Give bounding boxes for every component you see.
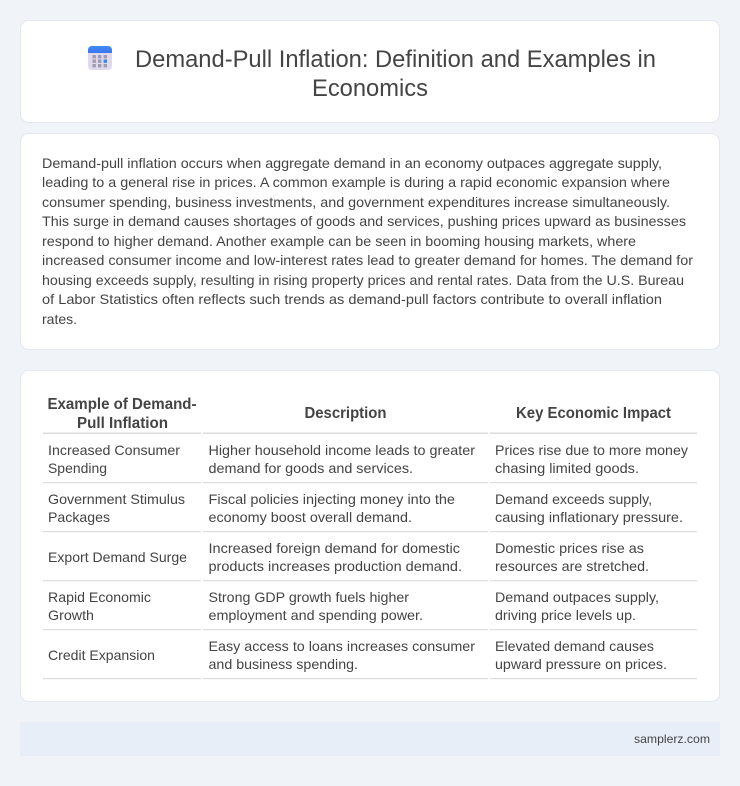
table row: rapid economic growth <box>43 589 697 630</box>
table header: Description <box>304 405 386 422</box>
table header: Key Economic Impact <box>516 405 671 422</box>
title text <box>135 46 656 102</box>
table row: government stimulus packages: Fiscal policies injecting money into the <box>208 491 455 507</box>
table row: government stimulus packages <box>43 491 697 532</box>
table row: rapid economic growth: Growth <box>48 607 94 623</box>
table row: credit expansion: and business spending. <box>208 656 358 672</box>
paragraph text: consumer spending, business investments, and government expenditures increase simultaneously. <box>42 194 670 210</box>
table row: government stimulus packages: causing inflationary pressure. <box>495 509 683 525</box>
panel: title <box>20 20 720 122</box>
table row: rapid economic growth: Demand outpaces supply, <box>495 589 659 605</box>
table row: export demand surge: Export Demand Surge <box>48 549 187 565</box>
table row: increased consumer spending: Spending <box>48 460 107 476</box>
title text: Demand-Pull Inflation: Definition and Examples in <box>135 46 656 73</box>
panel: examples table <box>20 370 720 702</box>
paragraph text: rates. <box>42 311 77 327</box>
table row: government stimulus packages: Packages <box>48 509 110 525</box>
table row: increased consumer spending: demand for goods and services. <box>208 460 413 476</box>
table header <box>43 396 697 434</box>
paragraph text: This surge in demand causes shortages of goods and services, pushing prices upward as businesses <box>42 213 686 229</box>
table row: export demand surge <box>43 540 697 581</box>
icon: calendar <box>88 46 112 70</box>
table row: export demand surge: resources are stretched. <box>495 558 649 574</box>
table row: increased consumer spending: chasing limited goods. <box>495 460 639 476</box>
table row: credit expansion: upward pressure on prices. <box>495 656 667 672</box>
footer <box>20 722 720 756</box>
table row: rapid economic growth: Strong GDP growth fuels higher <box>208 589 409 605</box>
paragraph text: Demand-pull inflation occurs when aggregate demand in an economy outpaces aggregate supply, <box>42 155 662 171</box>
table row: increased consumer spending: Increased Consumer <box>48 442 180 458</box>
footer: samplerz.com <box>634 732 710 746</box>
table row: credit expansion: Elevated demand causes <box>495 638 654 654</box>
table row: export demand surge: Increased foreign demand for domestic <box>208 540 460 556</box>
table row: government stimulus packages: Government Stimulus <box>48 491 185 507</box>
paragraph text: leading to a general rise in prices. A common example is during a rapid economic expansion where <box>42 174 670 190</box>
table row: rapid economic growth: driving price levels up. <box>495 607 636 623</box>
panel: definition paragraph <box>20 134 720 350</box>
table row: increased consumer spending <box>43 442 697 483</box>
table row: credit expansion: Credit Expansion <box>48 647 155 663</box>
table row: rapid economic growth: employment and spending power. <box>208 607 423 623</box>
title text: Economics <box>312 75 428 102</box>
table row: government stimulus packages: economy boost overall demand. <box>208 509 412 525</box>
table row: increased consumer spending: Prices rise due to more money <box>495 442 688 458</box>
table row: export demand surge: Domestic prices rise as <box>495 540 644 556</box>
paragraph text: increased consumer income and low-interest rates lead to greater demand for homes. The demand for <box>42 252 693 268</box>
table row: rapid economic growth: Rapid Economic <box>48 589 151 605</box>
table row: export demand surge: products increases production demand. <box>208 558 462 574</box>
table header: Pull Inflation <box>77 415 168 432</box>
paragraph text: of Labor Statistics often reflects such trends as demand-pull factors contribute to overall inflation <box>42 291 662 307</box>
paragraph text: housing exceeds supply, resulting in rising property prices and rental rates. Data from the U.S. Bureau <box>42 272 684 288</box>
paragraph text: respond to higher demand. Another example can be seen in booming housing markets, where <box>42 233 636 249</box>
table header: Example of Demand- <box>48 396 196 413</box>
paragraph text <box>42 155 693 327</box>
table row: credit expansion <box>43 638 697 679</box>
table row: credit expansion: Easy access to loans increases consumer <box>208 638 475 654</box>
table row: government stimulus packages: Demand exceeds supply, <box>495 491 652 507</box>
table row: increased consumer spending: Higher household income leads to greater <box>208 442 475 458</box>
